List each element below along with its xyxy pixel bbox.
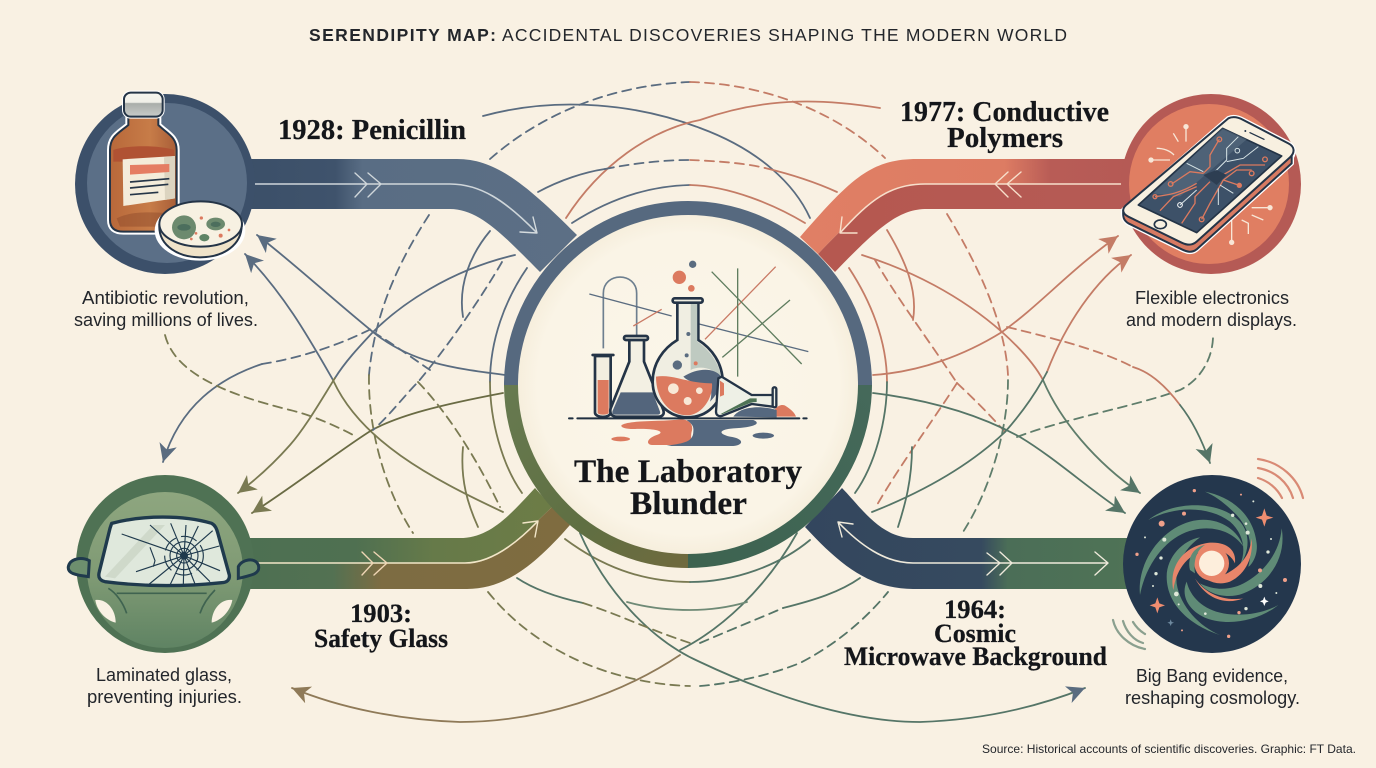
text: penicillin impact: [74, 288, 258, 330]
icon: radio waves upper right: [1258, 459, 1303, 498]
band: safety glass ribbon: [245, 488, 570, 589]
band: penicillin ribbon: [240, 159, 577, 272]
text: penicillin impact: saving millions of lives.: [74, 310, 258, 330]
source note: Source: Historical accounts of scientific discoveries. Graphic: FT Data.: [982, 742, 1356, 756]
text: penicillin impact: Antibiotic revolution,: [82, 288, 249, 308]
icon: lab glassware and spill: [569, 261, 808, 446]
label: 1977 conductive polymers: 1977: Conductive: [900, 97, 1109, 128]
label: 1928 penicillin: 1928: Penicillin: [278, 115, 466, 146]
text: cosmic background impact: reshaping cosmology.: [1125, 688, 1300, 708]
label: 1964 cosmic microwave background: Microwave Background: [844, 642, 1108, 671]
icon: radio waves lower left: [1113, 620, 1145, 649]
label: 1903 safety glass: [314, 599, 448, 653]
label: 1977 conductive polymers: Polymers: [947, 123, 1063, 154]
central hub circle: [511, 208, 865, 561]
web of thin connecting arcs: [163, 82, 1213, 722]
text: cosmic background impact: Big Bang evidence,: [1136, 666, 1288, 686]
band: conductive polymers ribbon: [800, 159, 1130, 272]
label: 1964 cosmic microwave background: Cosmic: [934, 619, 1016, 648]
text: safety glass impact: preventing injuries.: [87, 687, 242, 707]
label: 1964 cosmic microwave background: 1964:: [944, 595, 1006, 624]
label: 1964 cosmic microwave background: [844, 595, 1108, 671]
label: 1977 conductive polymers: [900, 97, 1109, 154]
hub label: [574, 454, 802, 522]
label: 1903 safety glass: 1903:: [350, 599, 412, 628]
text: conductive polymers impact: and modern displays.: [1126, 310, 1297, 330]
icon: medicine bottle: [110, 93, 177, 232]
icon: car with cracked windshield: [68, 517, 259, 623]
title: ACCIDENTAL DISCOVERIES SHAPING THE MODERN WORLD: [502, 25, 1067, 45]
text: cosmic background impact: [1125, 666, 1300, 708]
text: safety glass impact: Laminated glass,: [96, 665, 232, 685]
text: safety glass impact: [87, 665, 242, 707]
label: 1903 safety glass: Safety Glass: [314, 624, 448, 653]
panel: cosmic background icon: [1123, 475, 1301, 653]
icon: petri dish: [155, 201, 245, 261]
panel: penicillin icon: [75, 93, 255, 274]
text: conductive polymers impact: Flexible electronics: [1135, 288, 1289, 308]
icon: smartphone with circuits: [1123, 117, 1294, 252]
text: conductive polymers impact: [1126, 288, 1297, 330]
icon: spiral galaxy: [1135, 489, 1287, 638]
hub label: The Laboratory: [574, 454, 802, 490]
band: cosmic microwave ribbon: [805, 488, 1130, 589]
panel: safety glass icon: [68, 475, 259, 653]
panel: conductive polymers icon: [1121, 94, 1301, 274]
hub label: Blunder: [630, 486, 747, 522]
title: SERENDIPITY MAP:: [309, 25, 496, 45]
